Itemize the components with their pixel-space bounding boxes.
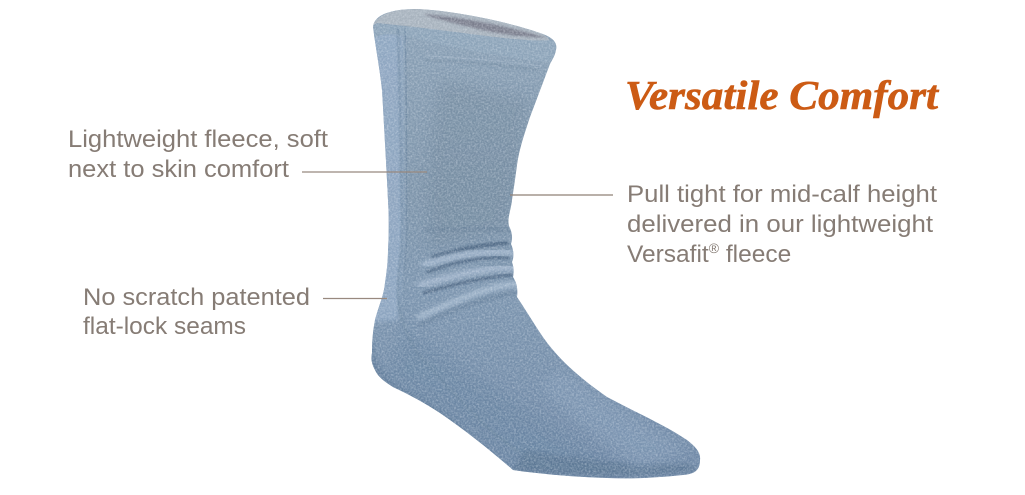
cuff interior (423, 14, 547, 38)
shading and folds (360, 0, 710, 490)
callout text: pull tight: delivered in our lightweight (627, 211, 933, 238)
callout text: pull tight: fleece (719, 241, 791, 268)
sock body (371, 9, 700, 478)
folds (420, 228, 517, 325)
callout text: fleece (68, 126, 328, 183)
callout line: pull tight (510, 194, 613, 196)
sock illustration (360, 0, 710, 490)
callout text: seams: No scratch patented (83, 284, 310, 311)
callout text: seams (83, 284, 310, 340)
cuff rim (374, 32, 550, 41)
title: Versatile Comfort (625, 72, 940, 118)
callout text: pull tight: Pull tight for mid-calf height (627, 181, 937, 208)
callout text: seams: flat-lock seams (83, 313, 246, 340)
callout line: fleece (302, 171, 427, 173)
callout text: pull tight: Versafit (627, 241, 709, 268)
callout text: fleece: Lightweight fleece, soft (68, 126, 328, 153)
callout line: seams (323, 298, 387, 300)
cuff opening (373, 9, 550, 41)
fleece texture (372, 9, 700, 478)
seam (396, 28, 542, 320)
callout text: pull tight (627, 181, 937, 268)
callout text: pull tight: ® (709, 240, 720, 256)
callout text: fleece: next to skin comfort (68, 156, 289, 183)
